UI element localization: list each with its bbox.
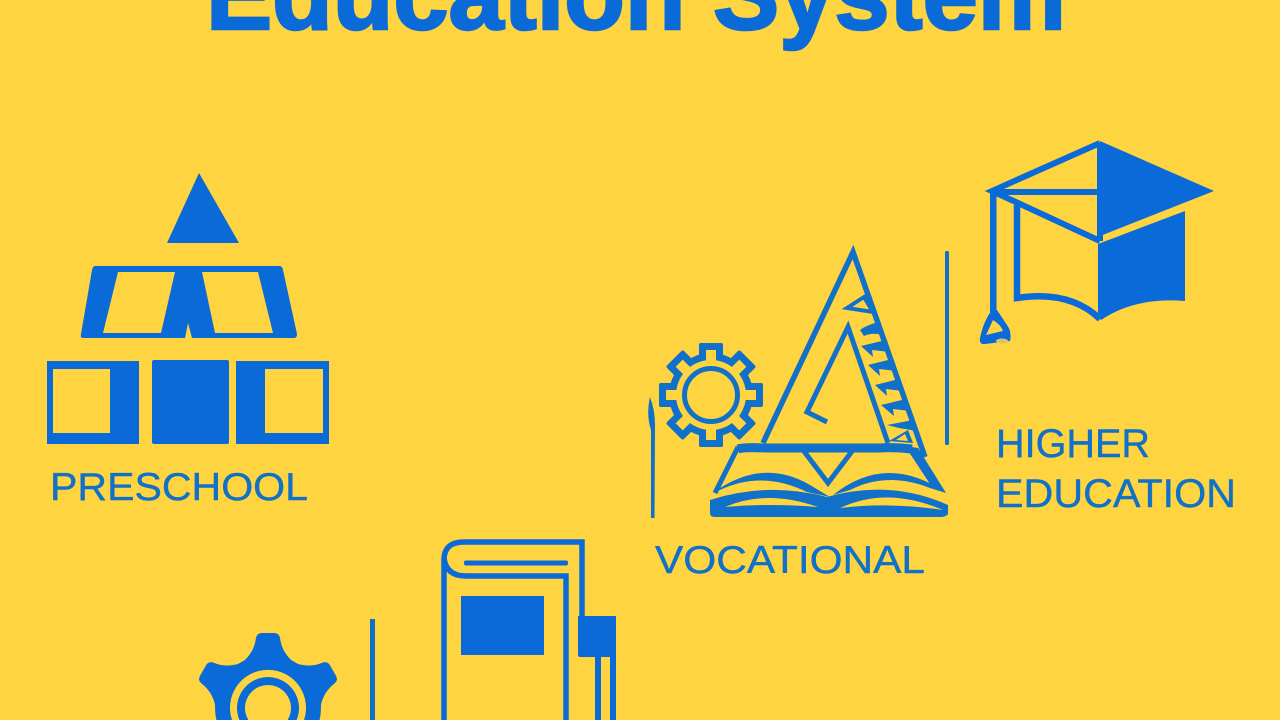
icon: open book xyxy=(710,446,948,517)
icon: set square xyxy=(763,252,925,457)
icon: gear outline xyxy=(659,343,763,447)
label: higher education: HIGHER xyxy=(996,422,1150,466)
divider bar left xyxy=(648,397,655,518)
label: preschool: PRESCHOOL xyxy=(50,466,308,509)
icon: graduation cap xyxy=(980,141,1214,344)
icon: book xyxy=(444,542,616,720)
panel: vocational xyxy=(648,251,949,582)
divider bar xyxy=(370,619,375,720)
icon: solid gear xyxy=(189,633,347,720)
panel: bottom stage xyxy=(189,542,616,720)
icon: preschool blocks xyxy=(47,173,329,444)
label: vocational: VOCATIONAL xyxy=(655,539,925,582)
divider bar right xyxy=(945,251,949,445)
label: higher education: EDUCATION xyxy=(996,472,1236,516)
panel: preschool xyxy=(47,173,329,509)
label: higher education xyxy=(996,422,1236,516)
panel: higher education xyxy=(980,141,1236,516)
